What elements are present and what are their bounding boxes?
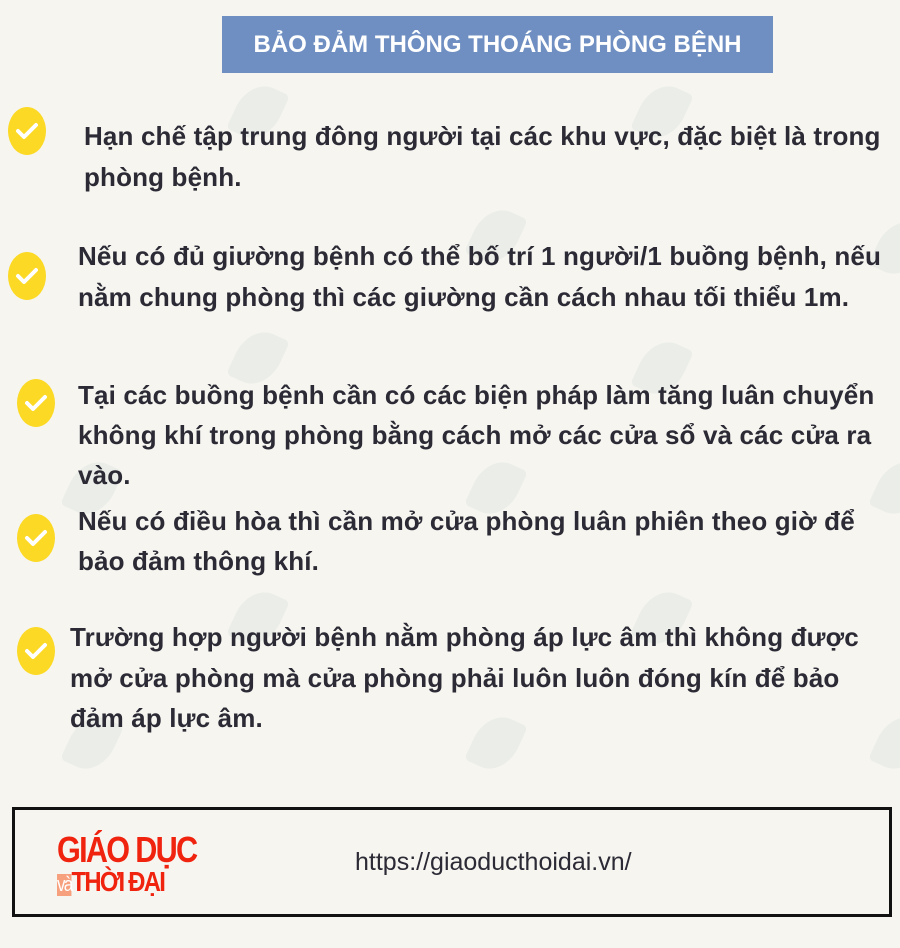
logo [57, 829, 198, 897]
icon: check 3 [17, 379, 55, 427]
title: BẢO ĐẢM THÔNG THOÁNG PHÒNG BỆNH [254, 31, 742, 58]
icon: check 2 [8, 252, 46, 300]
text: item 3: không khí trong phòng bằng cách mở các cửa sổ và các cửa ra [78, 420, 871, 450]
text: item 2 [78, 241, 881, 312]
text: item 5 [70, 622, 859, 733]
text: item 5: mở cửa phòng mà cửa phòng phải luôn luôn đóng kín để bảo [70, 662, 839, 692]
icon: check 4 [17, 514, 55, 562]
text: item 2: Nếu có đủ giường bệnh có thể bố trí 1 người/1 buồng bệnh, nếu [78, 241, 881, 271]
text: item 3: vào. [78, 460, 131, 490]
icon: check 1 [8, 107, 46, 155]
text: item 1: phòng bệnh. [84, 162, 242, 192]
text: item 3 [78, 380, 874, 490]
text: item 2: nằm chung phòng thì các giường cần cách nhau tối thiểu 1m. [78, 282, 849, 312]
text: item 5: Trường hợp người bệnh nằm phòng áp lực âm thì không được [70, 622, 859, 652]
footer panel [12, 807, 892, 917]
text: item 5: đảm áp lực âm. [70, 703, 263, 733]
text: item 1: Hạn chế tập trung đông người tại các khu vực, đặc biệt là trong [84, 121, 881, 151]
text: item 4: Nếu có điều hòa thì cần mở cửa phòng luân phiên theo giờ để [78, 506, 855, 536]
text: item 4: bảo đảm thông khí. [78, 546, 319, 576]
icon: check 5 [17, 627, 55, 675]
text: item 1 [84, 121, 881, 192]
logo: vàTHỜI ĐẠI [57, 866, 164, 897]
text: item 4 [78, 506, 855, 576]
url: https://giaoducthoidai.vn/ [355, 848, 632, 876]
logo: GIÁO DỤC [57, 829, 196, 870]
title [222, 16, 773, 73]
text: item 3: Tại các buồng bệnh cần có các biện pháp làm tăng luân chuyển [78, 380, 874, 410]
